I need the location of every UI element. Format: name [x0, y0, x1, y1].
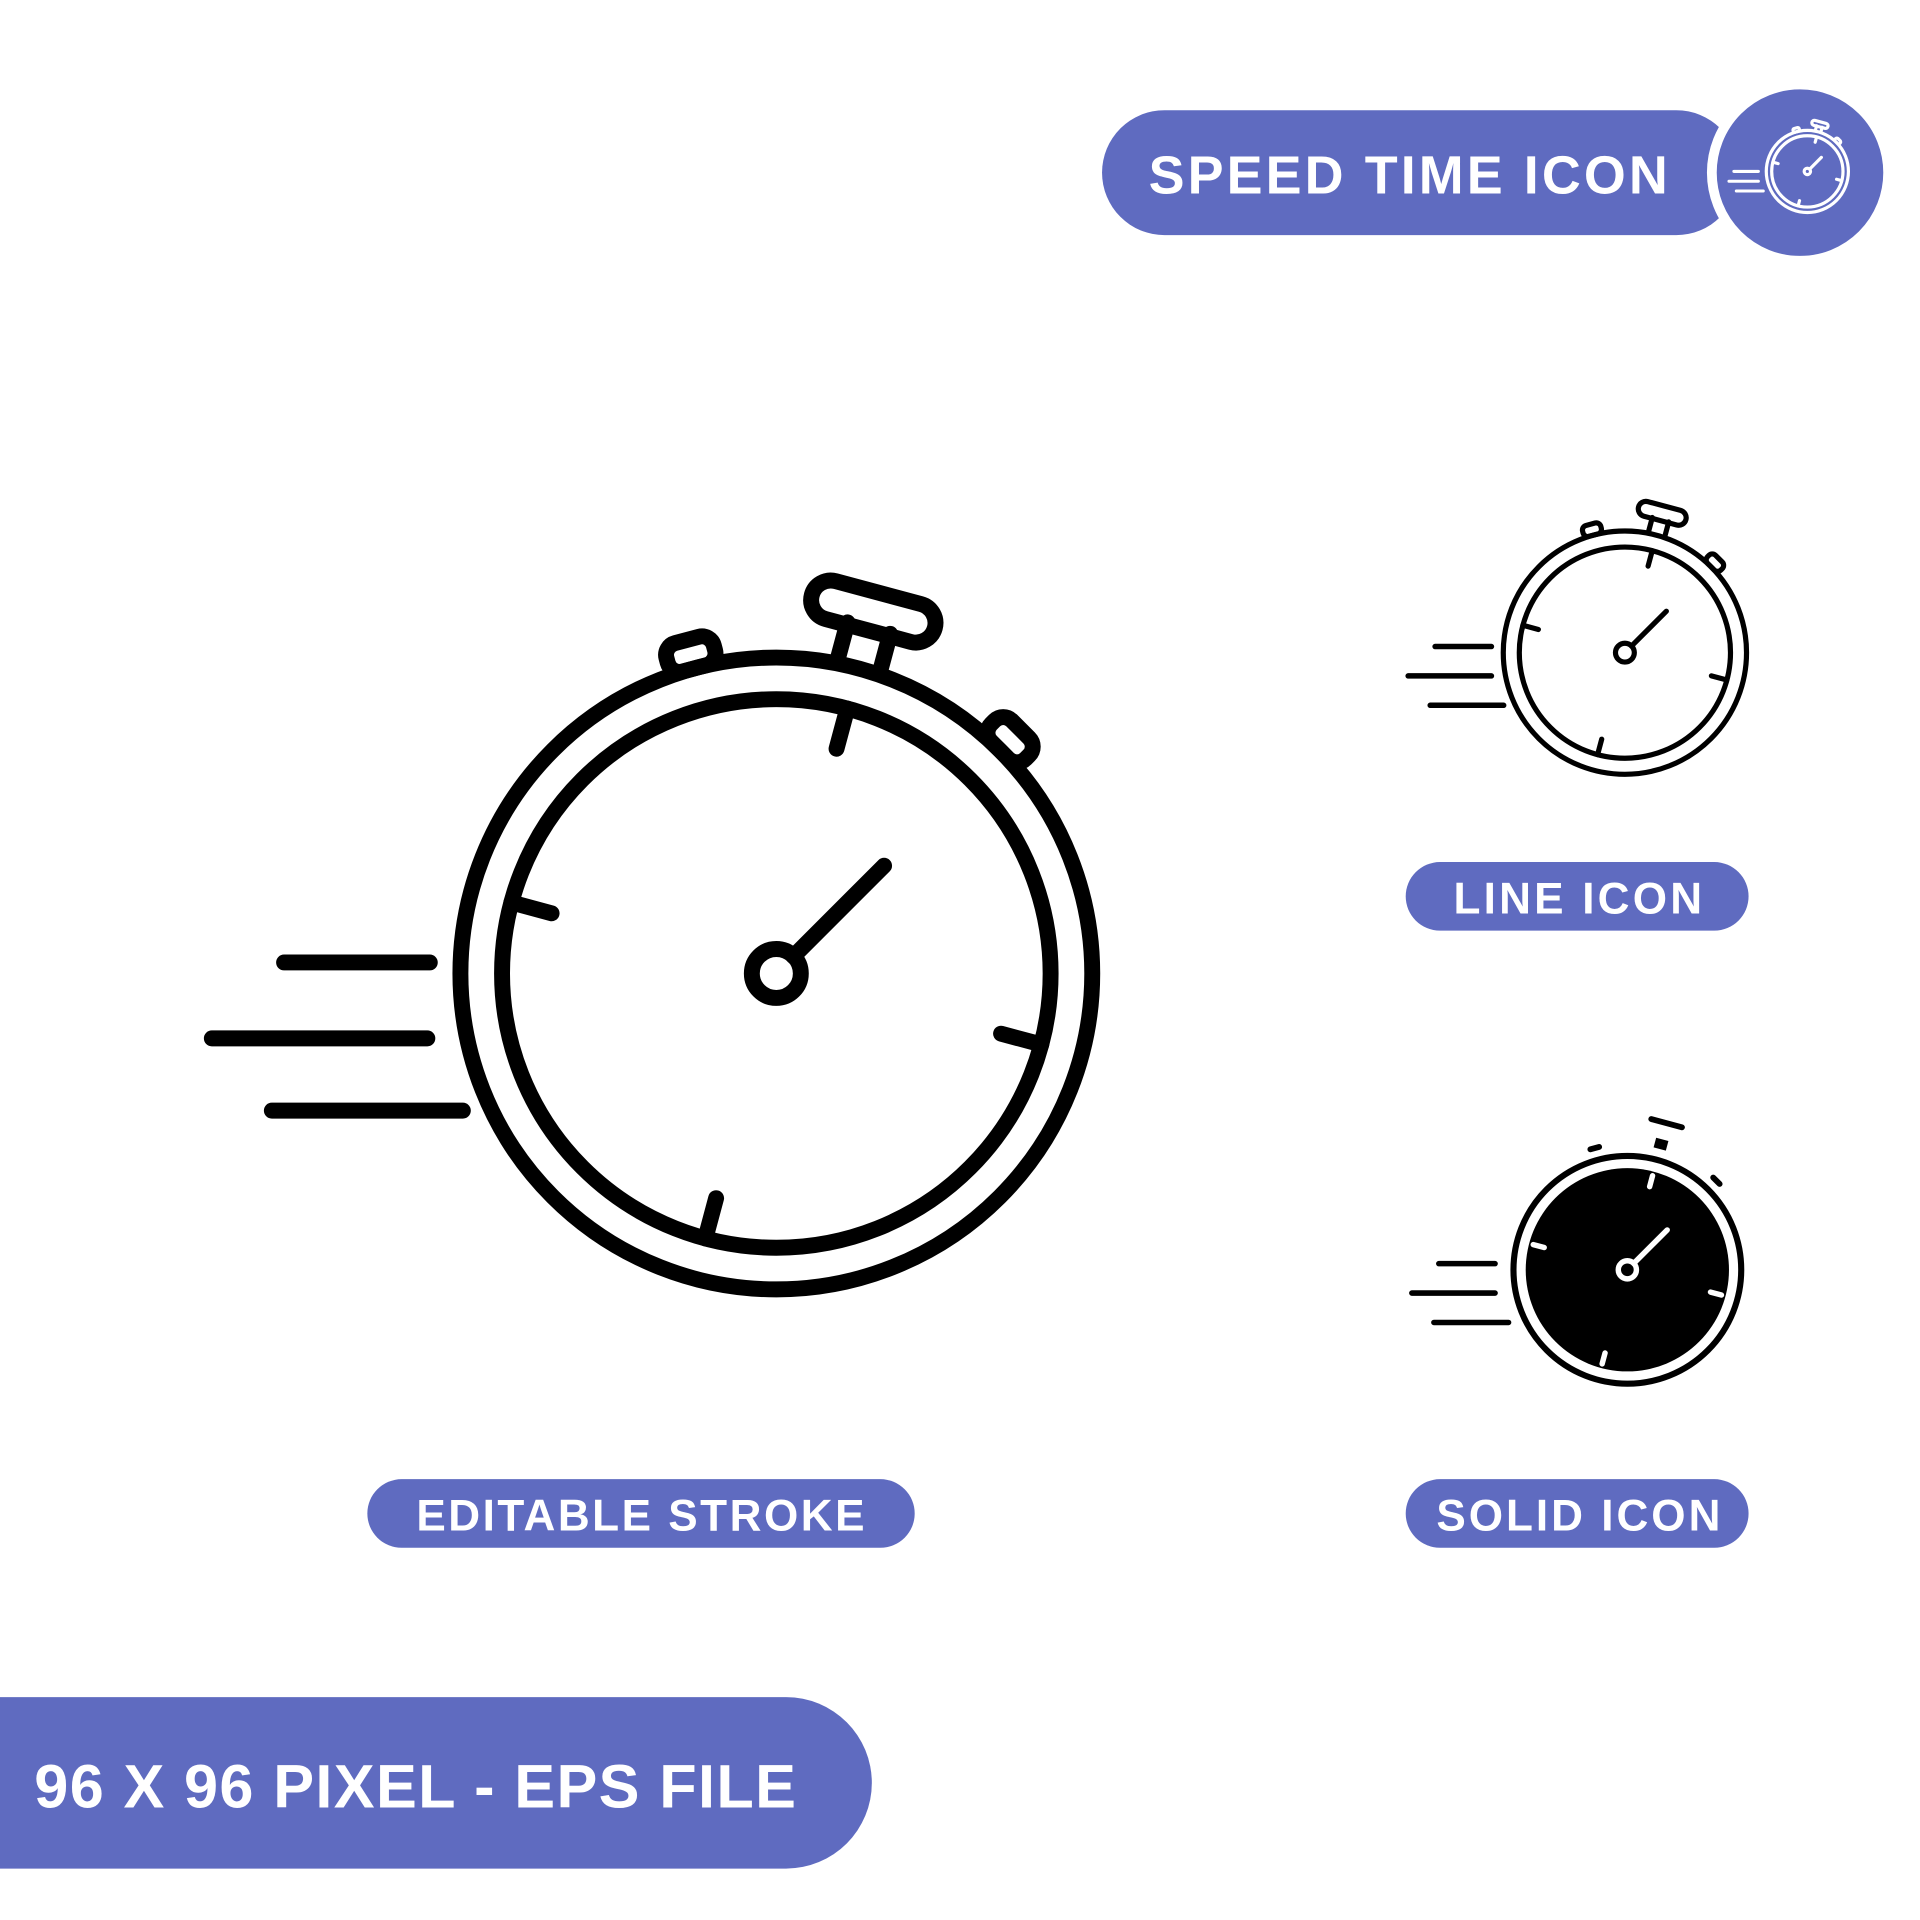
icon: header stopwatch badge [1712, 84, 1888, 261]
footer pill: file info [0, 1697, 872, 1869]
label: editable stroke: EDITABLE STROKE [416, 1492, 864, 1541]
icon: solid icon [1412, 1106, 1747, 1389]
title pill: SPEED TIME ICON [1149, 145, 1668, 205]
icon: line icon [1408, 479, 1766, 782]
label: solid icon: SOLID ICON [1436, 1492, 1720, 1541]
footer pill: file info: 96 X 96 PIXEL - EPS FILE [34, 1752, 796, 1820]
icon: main stopwatch editable stroke [212, 522, 1143, 1309]
label: line icon [1406, 862, 1749, 931]
label: solid icon [1406, 1479, 1749, 1548]
label: editable stroke [367, 1479, 915, 1548]
title pill [1102, 110, 1739, 235]
label: line icon: LINE ICON [1453, 874, 1702, 923]
